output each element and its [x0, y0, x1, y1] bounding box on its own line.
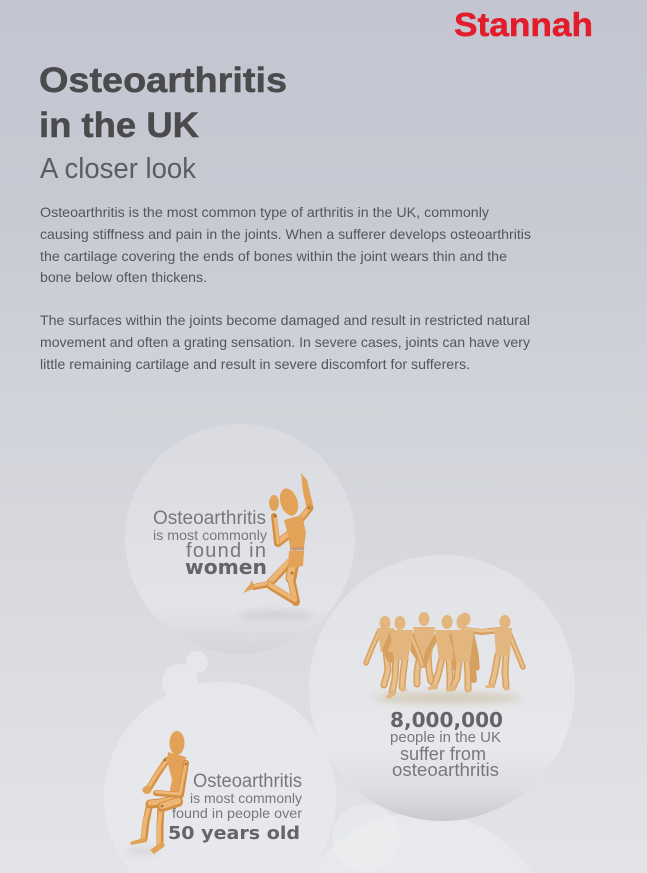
text: people over 50: found in people over — [172, 805, 302, 821]
intro paragraph 1 — [40, 204, 531, 285]
intro paragraph 1: bone below often thickens. — [40, 269, 207, 285]
circle background — [104, 682, 336, 873]
figure 1 — [366, 616, 396, 685]
panel: found in women — [125, 424, 355, 654]
decorative bubble: small — [186, 651, 208, 673]
panel: 8,000,000 people — [309, 555, 575, 821]
figure 6 — [445, 614, 477, 693]
figure 7 — [465, 615, 523, 691]
text: 8,000,000 people: 8,000,000 — [390, 708, 503, 732]
text: 8,000,000 people: people in the UK — [390, 729, 501, 746]
icon: group of wooden figures — [366, 612, 523, 699]
text: people over 50 — [168, 771, 302, 844]
text: 8,000,000 people: osteoarthritis — [392, 760, 499, 780]
text: found in women: is most commonly — [153, 527, 267, 543]
subtitle: A closer look — [40, 153, 196, 185]
intro paragraph 2 — [40, 312, 530, 372]
group shadow — [372, 693, 522, 703]
decorative bubble: medium — [162, 664, 198, 700]
decorative bubble: large — [332, 804, 400, 872]
text: found in women: women — [185, 555, 267, 579]
text: people over 50: is most commonly — [190, 790, 302, 806]
title: Osteoarthritis — [39, 61, 287, 100]
title — [39, 61, 287, 145]
figure 3 — [413, 612, 435, 684]
intro paragraph 2: movement and often a grating sensation. In severe cases, joints can have very — [40, 334, 530, 350]
text: 8,000,000 people — [390, 708, 503, 780]
intro paragraph 1: causing stiffness and pain in the joints. When a sufferer develops osteoarthritis — [40, 226, 531, 242]
icon: seated wooden figure — [130, 731, 187, 854]
intro paragraph 2: little remaining cartilage and result in severe discomfort for sufferers. — [40, 356, 470, 372]
figure shadow — [238, 612, 314, 618]
panel: people over 50 — [104, 682, 336, 873]
text: people over 50: 50 years old — [168, 823, 300, 844]
intro paragraph 2: The surfaces within the joints become damaged and result in restricted natural — [40, 312, 530, 328]
text: 8,000,000 people: suffer from — [400, 744, 486, 764]
figure 5 (back) — [460, 612, 474, 680]
title: in the UK — [39, 106, 199, 145]
text: people over 50: Osteoarthritis — [193, 771, 302, 792]
figure 4 — [424, 615, 456, 692]
circle background — [125, 424, 355, 654]
bottom partial circle — [310, 812, 532, 873]
figure shadow — [124, 848, 160, 854]
logo: Stannah: Stannah — [454, 6, 593, 43]
text: found in women — [153, 508, 267, 579]
circle background — [309, 555, 575, 821]
intro paragraph 1: the cartilage covering the ends of bones within the joint wears thin and the — [40, 248, 507, 264]
figure 2 — [385, 616, 422, 699]
text: found in women: found in — [186, 540, 266, 562]
icon: jumping wooden figure — [243, 473, 313, 602]
text: found in women: Osteoarthritis — [153, 508, 266, 529]
intro paragraph 1: Osteoarthritis is the most common type of arthritis in the UK, commonly — [40, 204, 489, 220]
